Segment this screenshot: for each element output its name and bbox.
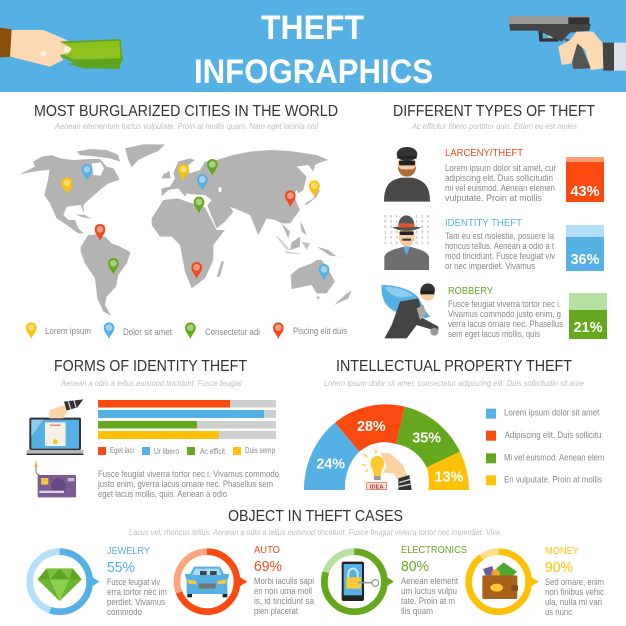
block: identity text: or nec imperdiet. Vivamus [445, 261, 535, 272]
icon: hand with gun [508, 16, 626, 71]
text: jewelry: perdiet. Vivamus [107, 597, 165, 608]
bar chart [98, 400, 276, 439]
bar: 36% [566, 225, 604, 271]
text: money: ula, nulla mi vari [545, 597, 602, 608]
map: americas [19, 144, 165, 316]
icon: identity thief: 0 0 1 [384, 225, 398, 229]
heading: intellectual property: INTELLECTUAL PROPERTY THEFT [336, 358, 572, 375]
block: identity text: Tam eu est molestie, posuere la [445, 231, 555, 242]
block: identity text: mod tincidunt. Fusce feugiat viv [445, 251, 555, 262]
block: robbery text: sem eget lacus mollis, quis [448, 329, 540, 340]
title: THEFT [261, 9, 364, 47]
text: money: 90% [545, 560, 573, 576]
ring: electronics [324, 552, 394, 612]
gauge legend: En vulputate. Proin at mollis [504, 474, 602, 485]
gauge chart: 13% [435, 470, 464, 486]
icon: identity thief: 0 1 1 [416, 230, 429, 234]
bar: 21%: 21% [573, 320, 603, 336]
text: auto: en non urna moll [254, 586, 312, 597]
text: jewelry: commodo [107, 607, 142, 618]
text: electronics: um luctus vulpu [401, 586, 457, 597]
text: money [545, 545, 604, 618]
text: jewelry: Fusce feugiat viv [107, 577, 160, 588]
panel: intellectual property theft [304, 358, 604, 490]
block: larceny text: adipiscing elit. Duis sollicitudin [445, 173, 553, 184]
block: robbery text: verra lacus ornare nec. Phasellus [448, 319, 563, 330]
icon: identity thief: 1 1 1 [416, 236, 429, 240]
text block: forms [97, 469, 279, 500]
bar chart legend: Ur libero [154, 447, 179, 456]
map legend: Dolor sit amet [123, 327, 172, 338]
icon: laptop with stolen document [27, 399, 83, 455]
icon: robber with sack [382, 283, 438, 338]
map legend [26, 322, 347, 339]
subtitle: types: Ac efficitur libero porttitor quis. Etiam eu est moles [411, 122, 577, 131]
text: jewelry [107, 545, 167, 618]
block: larceny text: mi vel euismod. Aenean elemen [445, 183, 555, 194]
icon: hand with money [0, 28, 123, 69]
title [194, 9, 433, 91]
icon: identity thief: 1 1 0 [384, 230, 398, 234]
subtitle: objects: Lacus vel, rhoncus tellus. Aenean a odio a tellus euismod tincidunt. Fusce feugiat viverra tortor nec imperdiet. Viva [129, 528, 501, 537]
map legend: Lorem ipsum [45, 326, 91, 337]
block: identity text: honcus tellus. Aenean a odio a t [445, 241, 554, 252]
icon: hooked credit card [34, 462, 76, 497]
text: auto [254, 544, 315, 617]
block: robbery text: ROBBERY [448, 285, 493, 297]
text: money: non finibus vehic [545, 587, 604, 598]
gauge legend [486, 408, 604, 485]
block: identity text: IDENTITY THEFT [445, 217, 523, 229]
panel: forms of identity theft [27, 358, 279, 500]
map legend: Piscing elit duis [293, 326, 347, 337]
bar: 43% [566, 157, 604, 202]
text: electronics: llis quam [401, 606, 433, 617]
map pins [62, 159, 329, 281]
text: electronics [401, 544, 467, 617]
icon: identity thief: 1 1 0 [416, 214, 429, 218]
icon: larceny thief [384, 147, 430, 202]
gauge legend: Lorem ipsum dolor sit amet [504, 408, 600, 419]
icon: idea bulb and hand: IDEA [370, 484, 383, 490]
icon: identity thief: 1 0 1 [416, 220, 429, 224]
gauge chart: 35% [412, 430, 441, 446]
block: robbery text: Fusce feugiat viverra tortor nec i. [448, 299, 561, 310]
bar: 36%: 36% [570, 252, 600, 268]
text: electronics: tate. Proin at m [401, 596, 455, 607]
text block: forms: justo enim, gverra lacus ornare nec. Phasellus sem [97, 479, 273, 490]
block: larceny text: LARCENY/THEFT [445, 147, 524, 159]
text: electronics: Aenean element [401, 576, 458, 587]
icon: identity thief: 1 1 0 [384, 241, 398, 245]
text: money: us nunc [545, 607, 572, 618]
text: electronics: ELECTRONICS [401, 544, 467, 556]
subtitle: cities: Aenean elementum luctus vulputate. Proin at mollis quam. Nam eget lacinia nisl [54, 122, 318, 131]
subtitle: forms: Aenean a odio a tellus euismod tincidunt. Fusce feugiat [60, 379, 243, 388]
block: larceny text: vulputate. Proin at mollis [445, 193, 542, 204]
bar chart legend [98, 446, 275, 456]
panel: object in theft cases [30, 508, 604, 618]
heading: cities: MOST BURGLARIZED CITIES IN THE WORLD [34, 103, 338, 120]
text: electronics: 80% [401, 559, 429, 575]
icon: identity thief: 0 0 1 [384, 214, 398, 218]
icon: identity thief [384, 214, 429, 270]
block: robbery text: Vivamus commodo justo enim, g [448, 309, 561, 320]
bar: 21% [569, 293, 607, 339]
panel: burglarized cities [19, 103, 352, 339]
block: larceny text: Lorem ipsum dolor sit amet, cur [445, 163, 556, 174]
heading: types: DIFFERENT TYPES OF THEFT [393, 103, 595, 120]
bar chart legend: Duis semp [245, 446, 275, 455]
text: jewelry: JEWELRY [107, 545, 150, 557]
text: auto: Morbi iaculis sapi [254, 576, 314, 587]
text: jewelry: 55% [107, 560, 135, 576]
panel: types of theft [382, 103, 607, 340]
text: auto: AUTO [254, 544, 280, 556]
header banner [0, 0, 626, 92]
gauge legend: Mi vel euismod. Aenean elem [504, 453, 604, 464]
ring: auto [177, 552, 247, 612]
ring: jewelry [30, 552, 99, 612]
map legend: Consectetur adi [205, 327, 260, 338]
icon: identity thief: 0 1 1 [384, 220, 398, 224]
gauge legend: Adipiscing elit. Duis sollicitu [505, 430, 601, 441]
bar chart legend: Ac efficit [200, 447, 226, 456]
block: larceny text [445, 147, 556, 204]
text block: forms: Fusce feugiat viverra tortor nec i. Vivamus commodo [98, 469, 279, 480]
gauge chart [304, 404, 469, 490]
block: robbery text [448, 285, 563, 340]
heading: objects: OBJECT IN THEFT CASES [228, 508, 403, 525]
text: auto: pien placerat [254, 606, 298, 617]
text: auto: 69% [254, 559, 282, 575]
world map [19, 144, 352, 316]
text: jewelry: erra tortor nec im [107, 587, 167, 598]
ring: money [469, 552, 539, 612]
block: identity text [445, 217, 555, 272]
icon: identity thief: 1 0 0 [416, 225, 429, 229]
text: money: MONEY [545, 545, 579, 557]
text block: forms: eget lacus mollis, quis. Aenean a odio [98, 489, 227, 500]
text: auto: is, id tincidunt sa [254, 596, 315, 607]
bar: 43%: 43% [570, 184, 600, 200]
map: eurasia, africa, oceania [152, 150, 352, 305]
gauge chart: 24% [316, 456, 345, 472]
title: INFOGRAPHICS [194, 53, 433, 91]
bar chart legend: Eget laci [110, 446, 134, 455]
icon: identity thief: 1 0 0 [384, 236, 398, 240]
icon: identity thief: 0 1 1 [416, 241, 429, 245]
icon: idea bulb and hand [362, 449, 412, 490]
gauge chart: 28% [357, 419, 386, 435]
subtitle: intellectual property: Lorem ipsum dolor sit amet, consectetur adipiscing elit. Duis sollicitudin sit ame [324, 379, 585, 388]
heading: forms: FORMS OF IDENTITY THEFT [54, 358, 247, 375]
text: money: Sed ornare, enim [545, 577, 604, 588]
